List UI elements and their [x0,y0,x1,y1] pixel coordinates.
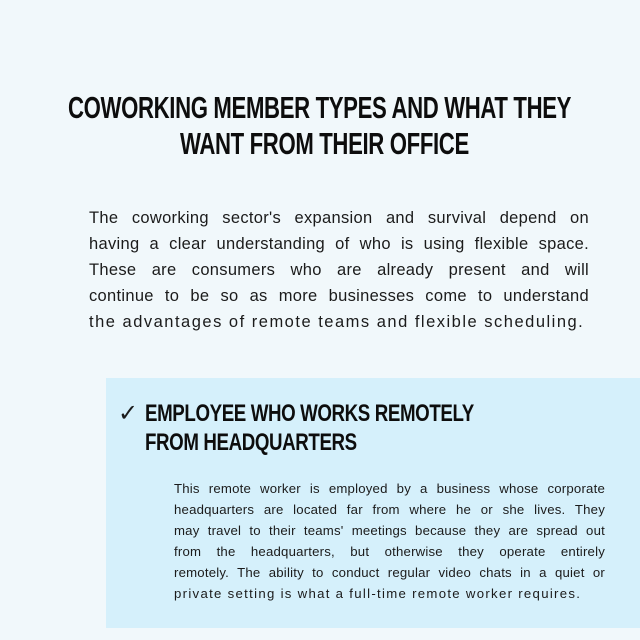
icon: checkmark: ✓ [118,399,138,427]
body text: may travel to their teams' meetings because they are spread out [174,523,605,538]
intro paragraph: the advantages of remote teams and flexible scheduling. [89,313,584,331]
title: COWORKING MEMBER TYPES AND WHAT THEY [68,90,571,125]
heading: EMPLOYEE WHO WORKS REMOTELY [145,400,474,427]
body text: remotely. The ability to conduct regular video chats in a quiet or [174,565,605,580]
body text: This remote worker is employed by a business whose corporate [174,481,605,496]
intro paragraph [89,209,589,331]
title: WANT FROM THEIR OFFICE [180,126,469,161]
body text: private setting is what a full-time remote worker requires. [174,586,581,601]
title [68,90,571,161]
heading [145,400,474,456]
intro paragraph: The coworking sector's expansion and survival depend on [89,209,589,227]
body text [174,481,605,601]
panel: remote employee [106,378,640,628]
intro paragraph: having a clear understanding of who is using flexible space. [89,235,589,253]
intro paragraph: continue to be so as more businesses come to understand [89,287,589,305]
heading: FROM HEADQUARTERS [145,429,357,456]
body text: from the headquarters, but otherwise they operate entirely [174,544,605,559]
body text: headquarters are located far from where he or she lives. They [174,502,605,517]
intro paragraph: These are consumers who are already present and will [89,261,589,279]
